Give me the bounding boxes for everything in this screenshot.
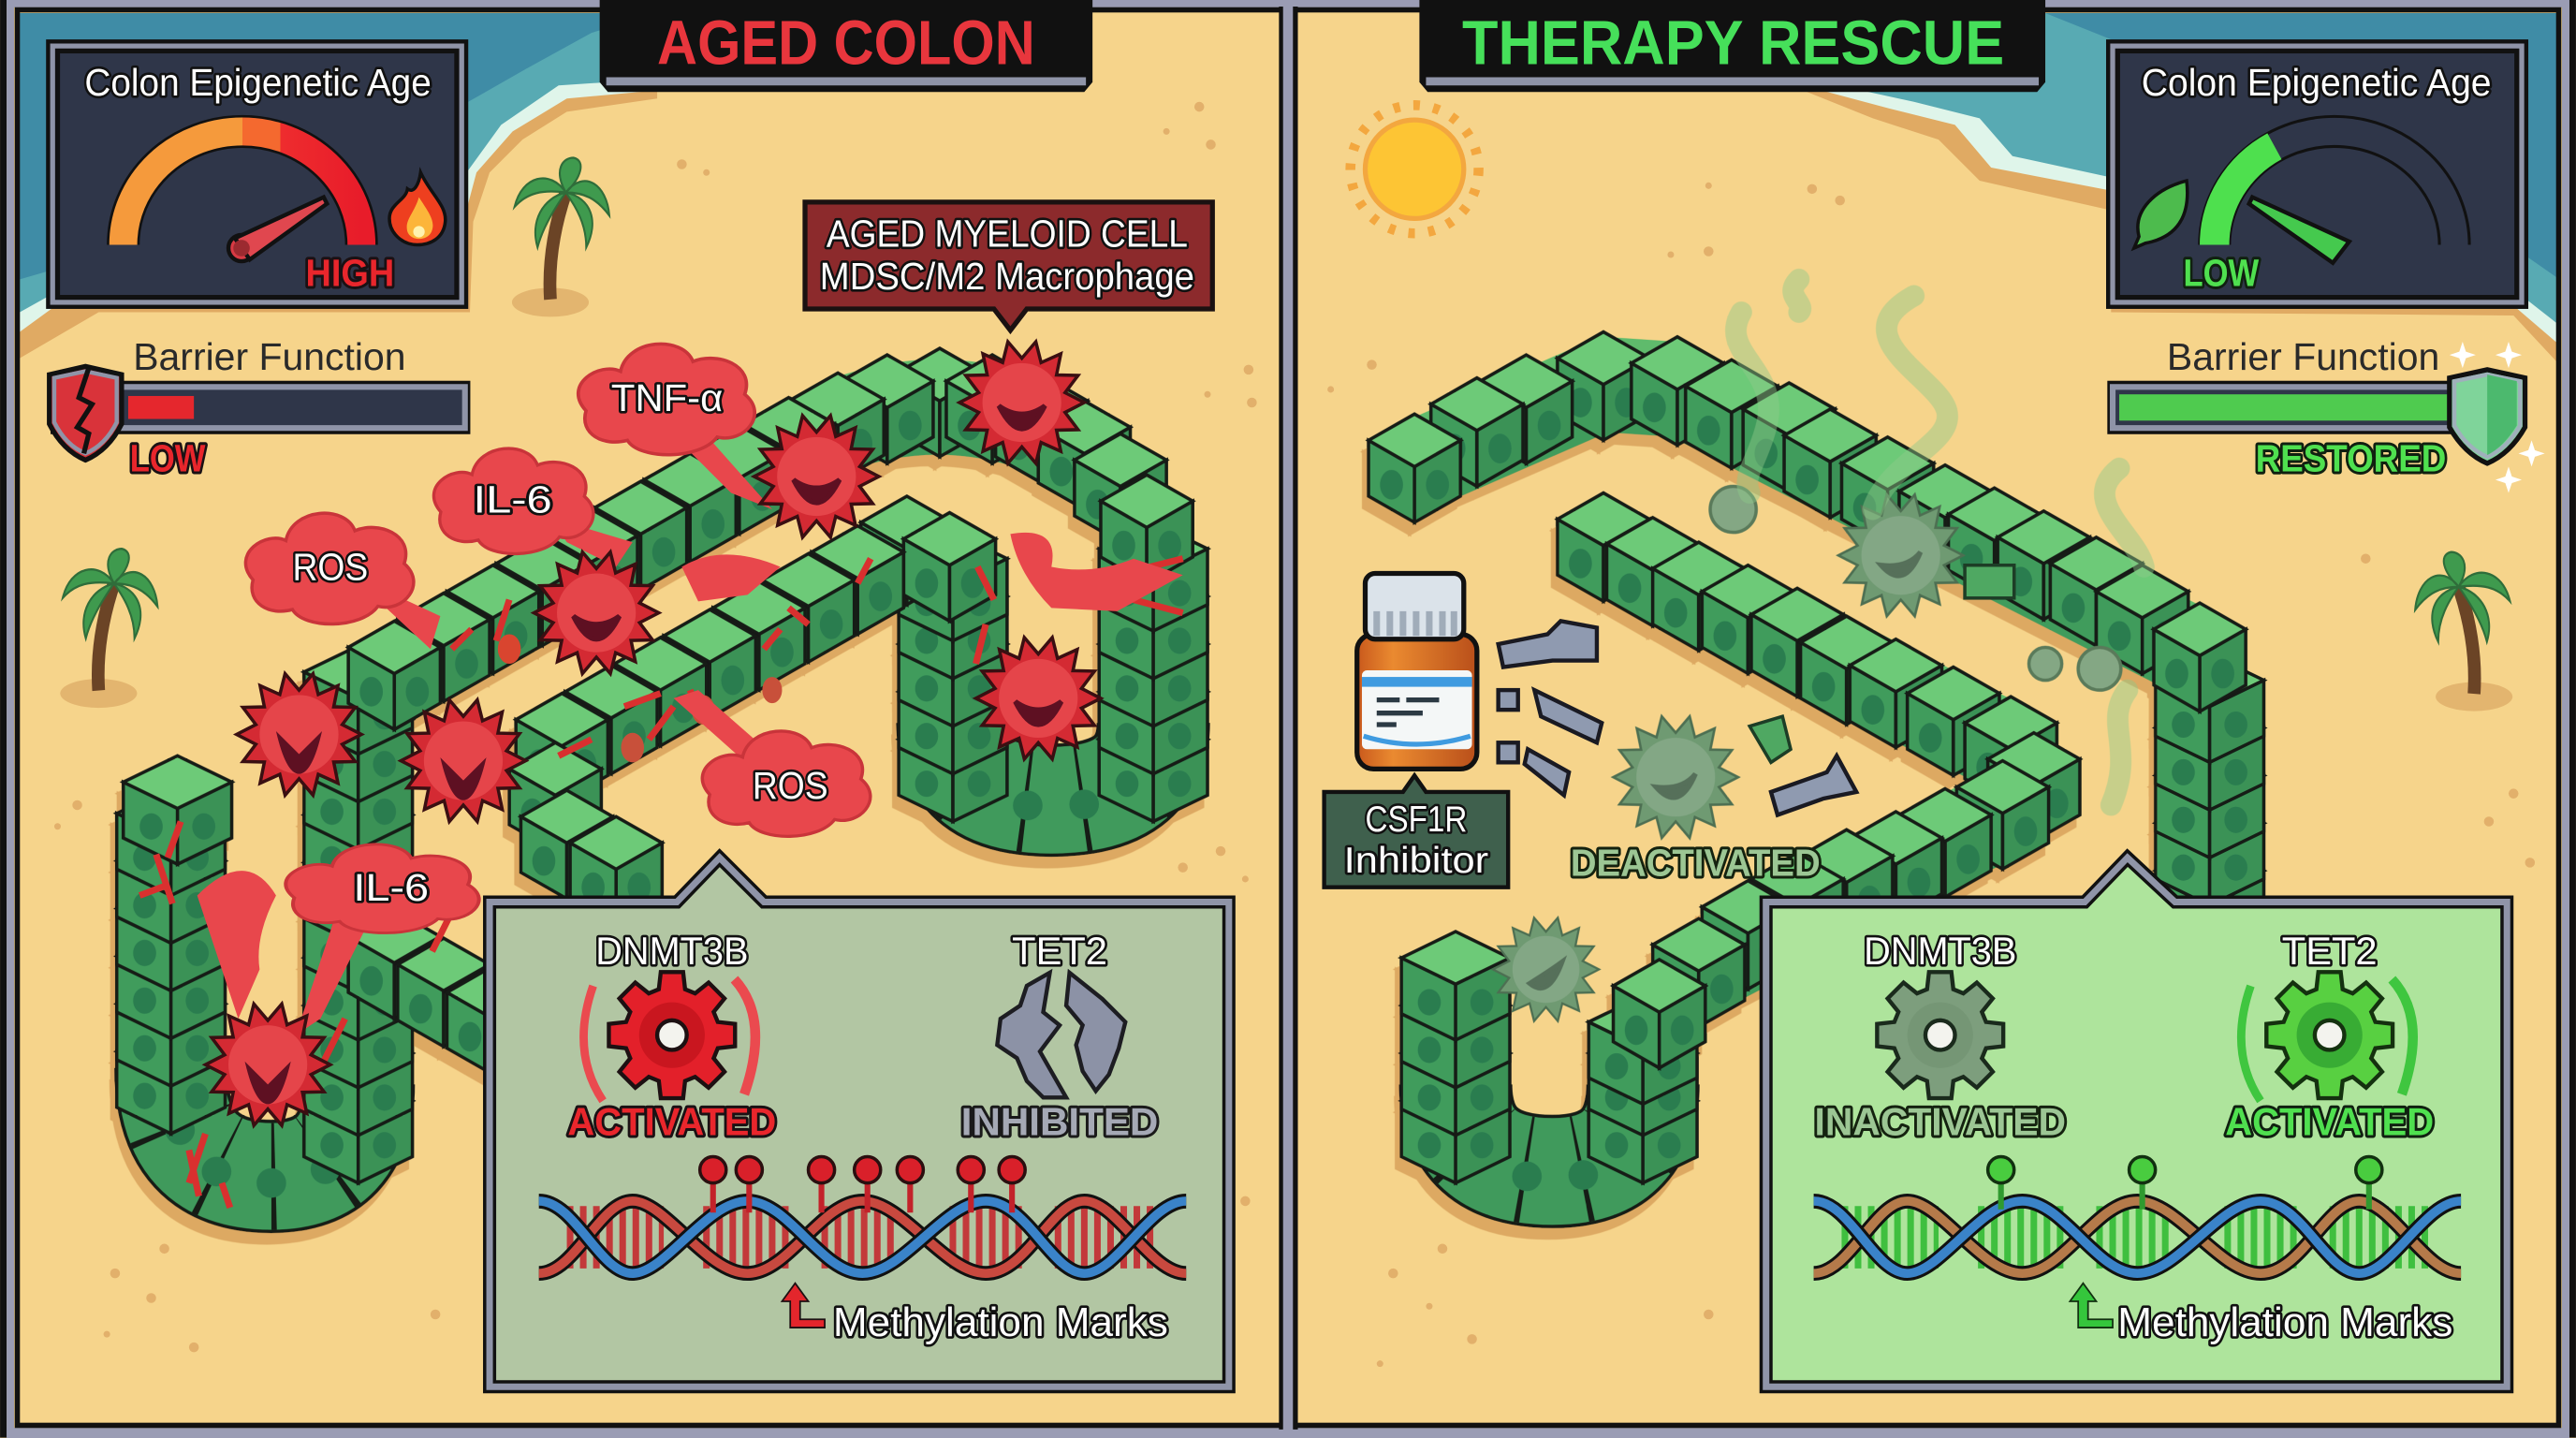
cytokine: IL-6 upper	[433, 448, 633, 566]
status label activated: ACTIVATED	[567, 1100, 776, 1144]
inner run backing	[1603, 520, 2027, 1035]
therapy colon epithelial tube	[1368, 332, 2263, 1183]
second column cells	[304, 646, 413, 1183]
icon: restored shield	[2450, 370, 2525, 463]
green smoke wisps	[1735, 279, 2144, 805]
icon: flame	[389, 172, 446, 244]
inner diagonal cells	[509, 496, 996, 925]
cytokine: TNF-alpha: TNF-α	[611, 376, 723, 419]
U columns	[1401, 932, 1697, 1183]
barrier function: low	[50, 335, 468, 480]
icon: sun	[1351, 105, 1479, 233]
panel: colon epigenetic age low	[2106, 39, 2528, 309]
cytokine: ROS upper	[245, 513, 440, 649]
label: Barrier Function	[133, 335, 406, 378]
inner diagonal backing	[562, 522, 907, 769]
ocean: right shoreline	[1782, 13, 2559, 365]
title: aged colon: AGED COLON	[657, 8, 1035, 78]
label: methylation marks: Methylation Marks	[833, 1299, 1168, 1345]
icon: activated gear	[584, 972, 755, 1101]
cytokine splats without labels	[198, 533, 1183, 1019]
arrow to methylation marks	[2070, 1284, 2113, 1328]
cytokine: ROS lower	[674, 690, 871, 836]
label: deactivated: DEACTIVATED	[1571, 841, 1821, 884]
label: colon epigenetic age: Colon Epigenetic Age	[2142, 61, 2492, 104]
title: therapy rescue	[1419, 0, 2045, 92]
panel: rescued epigenetic enzymes	[1766, 858, 2507, 1387]
enzyme label DNMT3B: DNMT3B	[1864, 929, 2016, 973]
level label: RESTORED	[2256, 437, 2446, 480]
cytokine: IL-6 lower	[285, 844, 479, 1035]
status label inhibited: INHIBITED	[961, 1100, 1158, 1144]
callout: aged myeloid cell: AGED MYELOID CELL	[827, 212, 1188, 255]
cytokine: ROS lower: ROS	[753, 764, 828, 807]
deactivated myeloid cells	[1493, 486, 2121, 1021]
cytokine: ROS upper: ROS	[292, 546, 368, 589]
panel: aged epigenetic enzymes	[490, 858, 1229, 1387]
enzyme label TET2: TET2	[2282, 929, 2378, 973]
icon: cracked shield	[50, 366, 122, 460]
callout: aged myeloid cell	[805, 202, 1212, 330]
cytokine: IL-6 upper: IL-6	[474, 478, 552, 521]
upper arch cells	[348, 348, 1193, 729]
status label inactivated: INACTIVATED	[1814, 1100, 2066, 1144]
label: CSF1R inhibitor: Inhibitor	[1344, 841, 1488, 881]
right column cells	[1099, 522, 1208, 822]
aged colon epithelial tube	[117, 348, 1208, 1183]
label: CSF1R inhibitor	[1325, 775, 1508, 888]
enzyme label TET2: TET2	[1012, 929, 1107, 973]
branch cells	[348, 910, 539, 1075]
inner column cells	[899, 533, 1007, 822]
left column cells	[117, 756, 232, 1134]
upper arch backing	[394, 381, 1147, 697]
cytokine: TNF-alpha	[578, 344, 772, 509]
gauge arc low	[2215, 131, 2454, 244]
far right column cells	[2156, 654, 2263, 953]
upper run backing	[1414, 359, 2200, 679]
icon: sparkles	[2450, 342, 2545, 493]
gauge needle	[228, 198, 327, 261]
inner run cells	[1558, 493, 2080, 1068]
label: CSF1R inhibitor: CSF1R	[1365, 800, 1467, 840]
bar	[52, 383, 468, 433]
panel: colon epigenetic age high	[46, 39, 468, 309]
icon: activated gear	[2241, 972, 2413, 1101]
icon: leaf	[2134, 181, 2188, 248]
upper run cells	[1368, 332, 2246, 712]
U bend	[1456, 1084, 1643, 1178]
enzyme label DNMT3B: DNMT3B	[595, 929, 748, 973]
level label low: LOW	[2183, 251, 2260, 294]
icon: inactivated gear	[1877, 972, 2003, 1098]
U bend right	[953, 723, 1153, 807]
arrow to methylation marks	[782, 1284, 825, 1328]
gauge needle	[2249, 198, 2349, 263]
methylation marks green	[1988, 1157, 2382, 1210]
palm tree: left	[60, 549, 157, 708]
broken receptor fragments	[1499, 621, 1856, 814]
level label high: HIGH	[305, 251, 394, 294]
label: methylation marks: Methylation Marks	[2117, 1299, 2452, 1345]
icon: CSF1R inhibitor bottle	[1357, 574, 1477, 769]
U bend lower left	[171, 1068, 359, 1183]
aged myeloid cells	[205, 342, 1101, 1125]
palm tree: upper left	[512, 157, 609, 316]
tissue damage splatter	[139, 559, 1183, 1208]
label: colon epigenetic age: Colon Epigenetic Age	[84, 61, 432, 104]
DNA helix restored	[1814, 1201, 2461, 1273]
cytokine: IL-6 lower: IL-6	[353, 866, 429, 909]
green epithelial fragments	[1749, 565, 2014, 762]
title: aged colon	[600, 0, 1092, 92]
status label activated: ACTIVATED	[2225, 1100, 2434, 1144]
icon: inhibited broken gear	[997, 973, 1125, 1097]
level label: LOW	[130, 437, 206, 480]
callout: aged myeloid cell: MDSC/M2 Macrophage	[820, 255, 1194, 298]
ocean: left shoreline	[17, 13, 657, 359]
bar	[2110, 383, 2474, 433]
title: therapy rescue: THERAPY RESCUE	[1462, 8, 2004, 78]
label: Barrier Function	[2167, 335, 2439, 378]
methylation marks red	[700, 1157, 1025, 1212]
barrier function: restored	[2110, 335, 2545, 493]
gauge arc high	[124, 131, 361, 244]
DNA helix with methylation	[539, 1201, 1186, 1273]
palm tree: right	[2415, 552, 2512, 712]
